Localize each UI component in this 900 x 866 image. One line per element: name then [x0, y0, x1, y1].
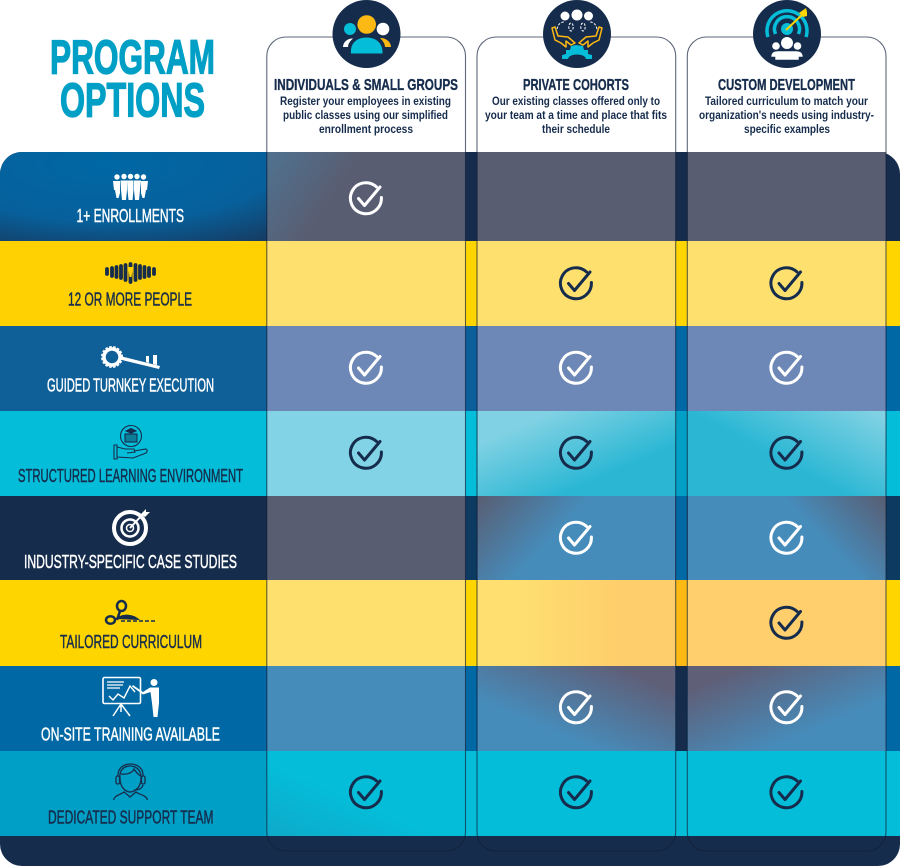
description: Register your employees in existing [280, 96, 451, 108]
icon: presenter at board [103, 678, 159, 717]
column 1 cells [267, 152, 466, 836]
row: tailored curriculum [60, 601, 202, 652]
label: 1+ ENROLLMENTS [76, 205, 184, 226]
title: OPTIONS [60, 74, 205, 128]
column header: private cohorts [485, 0, 667, 136]
description: Our existing classes offered only to [492, 96, 660, 108]
description [485, 96, 667, 136]
description: enrollment process [319, 124, 413, 136]
icon: hand holding book [114, 426, 147, 459]
column header: custom development [699, 0, 874, 136]
description: Tailored curriculum to match your [705, 96, 868, 108]
description: specific examples [744, 124, 830, 136]
check marks: column 2 [560, 268, 591, 808]
check marks: column 1 [350, 183, 381, 808]
label: ON-SITE TRAINING AVAILABLE [41, 724, 220, 744]
description: public classes using our simplified [283, 110, 448, 122]
check marks: column 3 [771, 268, 802, 808]
label: STRUCTURED LEARNING ENVIRONMENT [18, 465, 243, 486]
icon: gear key [102, 347, 160, 369]
row: 12 or more people [68, 264, 192, 310]
icon: people group [332, 0, 400, 68]
title [50, 32, 215, 128]
row: 1+ enrollments [76, 174, 184, 226]
column header: individuals and small groups [274, 0, 458, 136]
label: INDUSTRY-SPECIFIC CASE STUDIES [24, 551, 237, 572]
title: PROGRAM [50, 32, 215, 84]
icon: target and team [753, 0, 821, 68]
icon: target with arrow [114, 509, 150, 544]
column 2 cells [478, 152, 676, 836]
label: TAILORED CURRICULUM [60, 631, 202, 652]
label: DEDICATED SUPPORT TEAM [48, 806, 214, 828]
description: their schedule [542, 124, 610, 136]
description: organization's needs using industry- [699, 110, 874, 122]
icon: scissors [106, 601, 156, 624]
description [280, 96, 451, 136]
heading: PRIVATE COHORTS [523, 77, 629, 94]
row: dedicated support team [48, 764, 214, 828]
label: GUIDED TURNKEY EXECUTION [47, 374, 214, 396]
row: industry-specific case studies [24, 509, 237, 572]
description: your team at a time and place that fits [485, 110, 667, 122]
icon: support agent [114, 764, 148, 800]
icon: hands and gear [543, 0, 611, 68]
row: structured learning environment [18, 426, 243, 486]
column outlines [267, 37, 886, 851]
icon: five people [113, 174, 148, 200]
row: guided turnkey execution [47, 347, 214, 396]
icon: crowd [107, 264, 154, 282]
column 3 cells [688, 152, 886, 836]
description [699, 96, 874, 136]
heading: INDIVIDUALS & SMALL GROUPS [274, 77, 458, 94]
label: 12 OR MORE PEOPLE [68, 288, 192, 310]
row: on-site training available [41, 678, 220, 744]
